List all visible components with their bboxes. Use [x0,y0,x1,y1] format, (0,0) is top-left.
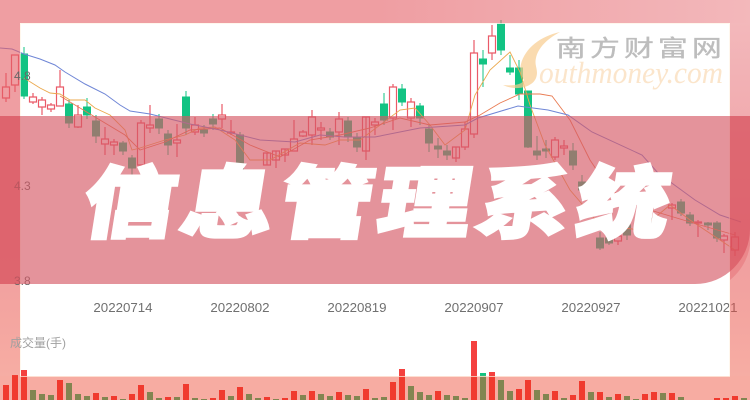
chart: date axis labels [93,300,738,315]
moving average line: medium [60,94,735,235]
band edge tint left [0,116,20,284]
title: 统 [569,141,679,254]
volume bar top accent [480,373,486,376]
title: 理 [371,141,481,254]
title: 信 [76,141,186,254]
axis label 4.8: 4.8 [14,69,31,83]
volume label: 成交量(手) [10,335,66,350]
candles: rising hollow [2,25,738,256]
title: 管 [273,141,383,254]
title [76,141,679,254]
candles: falling solid [20,20,720,250]
chart: date axis labels: 20220907 [444,300,504,315]
band edge tint right [730,116,750,280]
watermark domain: outhmoney.com [539,55,723,90]
chart: date axis labels: 20220714 [93,300,153,315]
title: 息 [174,141,284,254]
icon: swoosh S [503,32,560,88]
chart: volume bars falling [30,373,747,400]
chart: price candlesticks with moving averages [0,20,741,256]
chart: price axis labels [14,69,31,288]
watermark Chinese name: 南方财富网 [556,35,726,61]
title: 系 [470,141,580,254]
chart: date axis labels: 20220802 [210,300,270,315]
band: red title ribbon with rounded corner [0,116,750,284]
chart: volume bars rising [3,341,738,400]
chart: date axis labels: 20220927 [561,300,621,315]
moving average line: short [24,52,735,250]
axis label 4.3: 4.3 [14,179,31,193]
chart: date axis labels: 20220819 [327,300,387,315]
watermark logo [503,32,726,90]
moving average line: long [0,48,741,222]
chart: date axis labels: 20221021 [678,300,738,315]
axis label 3.8: 3.8 [14,274,31,288]
